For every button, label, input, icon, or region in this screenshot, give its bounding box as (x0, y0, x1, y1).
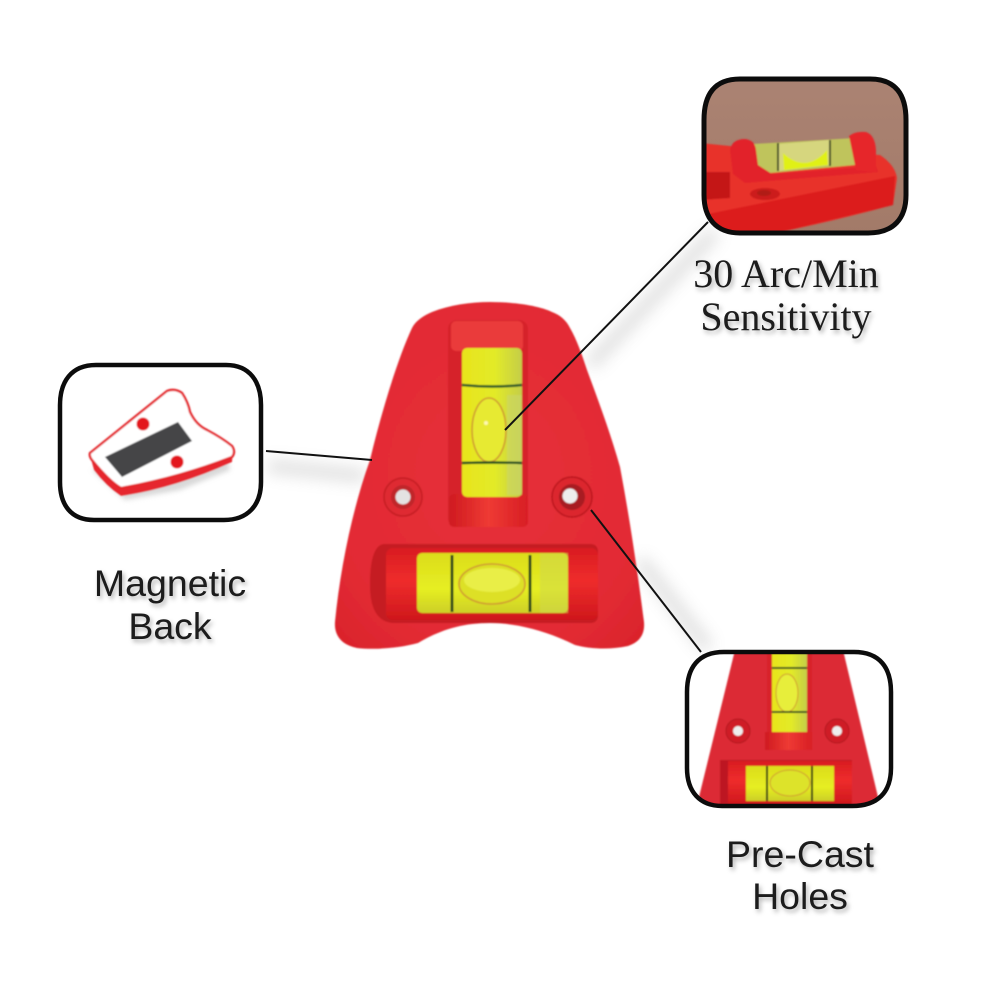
panel: pre-cast holes close-up (685, 650, 893, 810)
label: 30 Arc/Min Sensitivity: Sensitivity (700, 294, 872, 339)
vial glass (752, 138, 855, 173)
vertical vial (768, 654, 812, 731)
main product: red level (335, 302, 644, 649)
label: 30 Arc/Min Sensitivity: 30 Arc/Min (693, 251, 879, 296)
horizontal vial (720, 760, 852, 805)
label: Pre-Cast Holes: Holes (752, 875, 848, 917)
vial glass (417, 553, 568, 613)
horizontal vial (370, 544, 598, 623)
label: 30 Arc/Min Sensitivity (693, 251, 879, 339)
dot (136, 418, 150, 430)
label: Magnetic Back: Magnetic (94, 562, 246, 604)
panel: magnetic back (60, 365, 261, 520)
level body (335, 302, 644, 649)
vial bubble (459, 564, 525, 604)
recess (370, 544, 598, 623)
left hole (726, 719, 750, 743)
shadows behind leader lines (268, 232, 715, 648)
vial housing (730, 139, 878, 183)
label: Magnetic Back: Back (128, 605, 212, 647)
right hole (825, 719, 849, 743)
label: Magnetic Back (94, 562, 246, 647)
leader line: sensitivity (505, 222, 708, 430)
leader line: pre-cast holes (591, 510, 701, 652)
vial housing (448, 320, 528, 527)
vial glass (462, 348, 522, 497)
vial bubble (472, 398, 506, 462)
dot (170, 456, 184, 468)
magnetic strip (105, 422, 192, 477)
vertical vial (448, 320, 528, 527)
red base (700, 143, 897, 236)
right hole (552, 477, 592, 517)
back of level (90, 390, 234, 500)
mounting hole (750, 188, 780, 200)
label: Pre-Cast Holes (726, 833, 875, 917)
panel: sensitivity close-up (700, 75, 910, 240)
label: Pre-Cast Holes: Pre-Cast (726, 833, 875, 875)
left hole (384, 478, 422, 516)
vial housing (386, 548, 598, 620)
leader line: magnetic back (266, 451, 372, 460)
red body (698, 650, 880, 810)
